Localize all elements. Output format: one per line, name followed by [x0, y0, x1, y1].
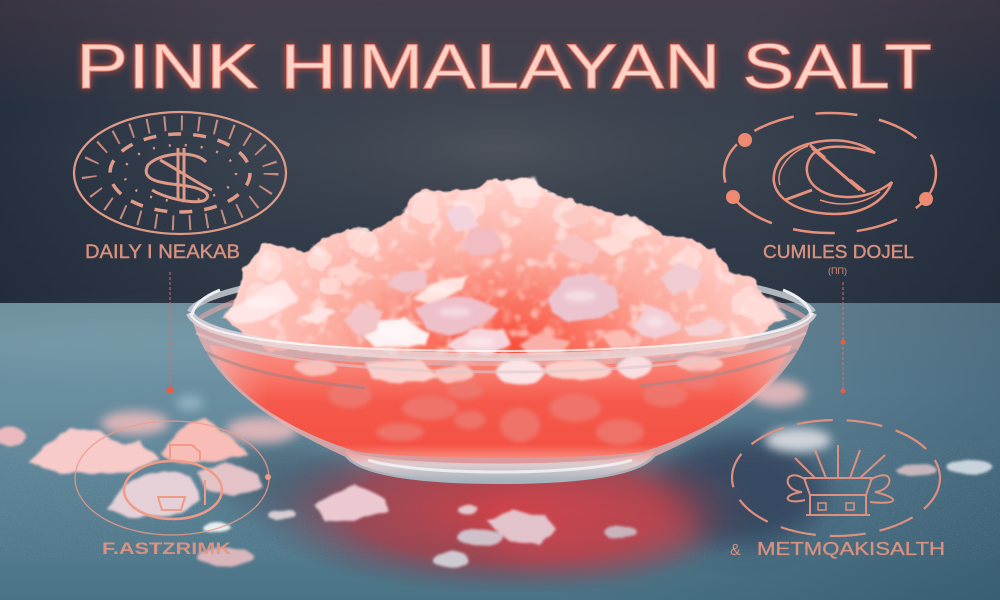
salt seen through the glass — [210, 345, 792, 458]
crystal highlights — [244, 286, 664, 347]
red reflection under bowl — [220, 425, 825, 595]
label: daily: DAILY I NEAKAB — [85, 242, 240, 263]
leader line right — [828, 266, 847, 394]
icon: bottle medallion — [75, 421, 271, 535]
icon: dollar medallion — [74, 112, 286, 234]
background wall — [0, 0, 1000, 305]
label: cumiles: CUMILES DOJEL — [763, 242, 914, 262]
title: PINK HIMALAYAN SALT — [76, 32, 932, 102]
pale crystals on the mound — [225, 178, 785, 356]
icon: crescent moon medallion — [724, 113, 936, 233]
label: metmqakisalth: & — [730, 542, 741, 559]
label: metmqakisalth: METMQAKISALTH — [757, 539, 945, 559]
glass bowl back rim — [190, 265, 813, 318]
leader line left — [166, 272, 174, 394]
icon: crown basket medallion — [732, 420, 940, 536]
glass bowl body — [193, 322, 810, 483]
texture blotches — [224, 180, 786, 366]
pale edge grains — [246, 177, 762, 316]
table surface — [0, 303, 1000, 600]
label: fastzrimk: F.ASTZRIMK — [102, 539, 232, 558]
glass foot — [345, 450, 655, 483]
salt mound — [215, 170, 795, 375]
leader line right: (ΠΠ) — [828, 266, 847, 276]
title: PINK HIMALAYAN SALT — [76, 32, 932, 102]
crystals seen through the glass — [293, 356, 724, 385]
scattered salt crystals — [0, 380, 993, 568]
glass bowl front rim — [190, 290, 813, 388]
